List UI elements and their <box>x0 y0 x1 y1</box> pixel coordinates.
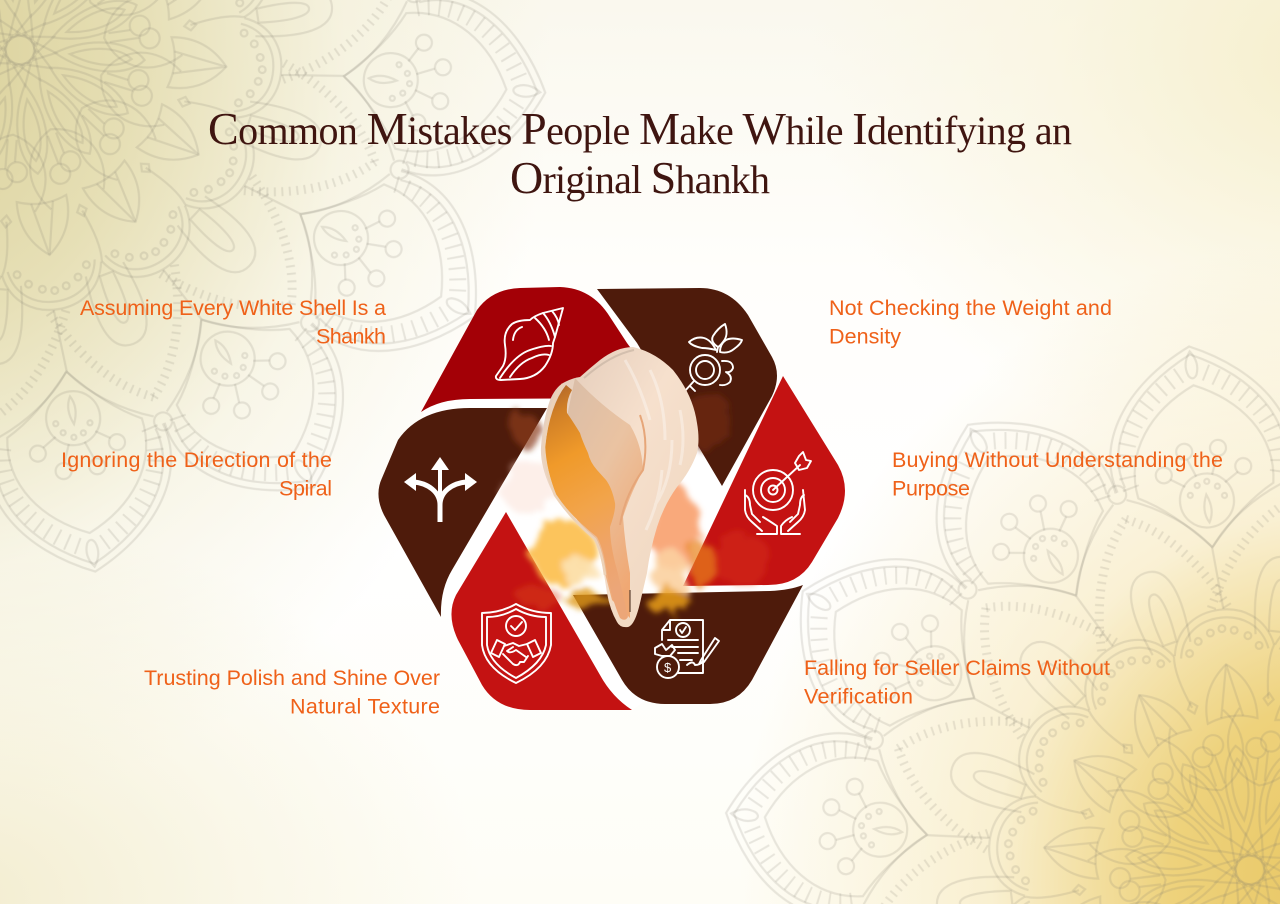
segment: top left <box>421 287 668 412</box>
title: Original Shankh <box>510 152 770 203</box>
title <box>208 103 1072 203</box>
segment: right <box>683 376 845 586</box>
label: trusting polish <box>144 666 440 718</box>
label: trusting polish: Natural Texture <box>290 694 440 718</box>
icon: magnifier with plant <box>684 324 742 392</box>
segment: left <box>378 408 547 617</box>
label: buying without purpose: Purpose <box>892 476 970 500</box>
label: buying without purpose <box>892 448 1223 500</box>
segment: bottom right <box>573 585 803 704</box>
label: ignoring direction of spiral: Spiral <box>279 476 332 500</box>
label: ignoring direction of spiral <box>61 448 332 500</box>
label: not checking weight: Not Checking the Weight and <box>829 296 1112 320</box>
ink smoke behind shell <box>500 390 772 617</box>
mandala: top left <box>0 0 550 580</box>
label: buying without purpose: Buying Without Understanding the <box>892 448 1223 472</box>
icon: dollar sign: $ <box>664 660 672 675</box>
label: falling for seller claims <box>804 656 1110 708</box>
hexagon cycle diagram <box>378 287 845 710</box>
segment: top right <box>597 288 777 486</box>
label: ignoring direction of spiral: Ignoring the Direction of the <box>61 448 332 472</box>
label: assuming every white shell <box>80 296 386 348</box>
label: not checking weight: Density <box>829 324 901 348</box>
icon: document and money bag <box>655 620 719 678</box>
mandala: bottom right <box>720 340 1280 904</box>
label: not checking weight <box>829 296 1112 348</box>
icon: shield with handshake <box>482 604 551 683</box>
label: falling for seller claims: Falling for Seller Claims Without <box>804 656 1110 680</box>
icon: conch shell <box>496 308 563 380</box>
shell centerpiece <box>541 347 698 627</box>
icon: target and hands <box>745 452 811 534</box>
title: Common Mistakes People Make While Identifying an <box>208 103 1072 154</box>
label: assuming every white shell: Shankh <box>316 324 386 348</box>
icon: branching arrows <box>404 457 477 522</box>
label: trusting polish: Trusting Polish and Shine Over <box>144 666 440 690</box>
label: assuming every white shell: Assuming Every White Shell Is a <box>80 296 386 320</box>
segment: bottom left <box>451 512 632 710</box>
label: falling for seller claims: Verification <box>804 684 913 708</box>
